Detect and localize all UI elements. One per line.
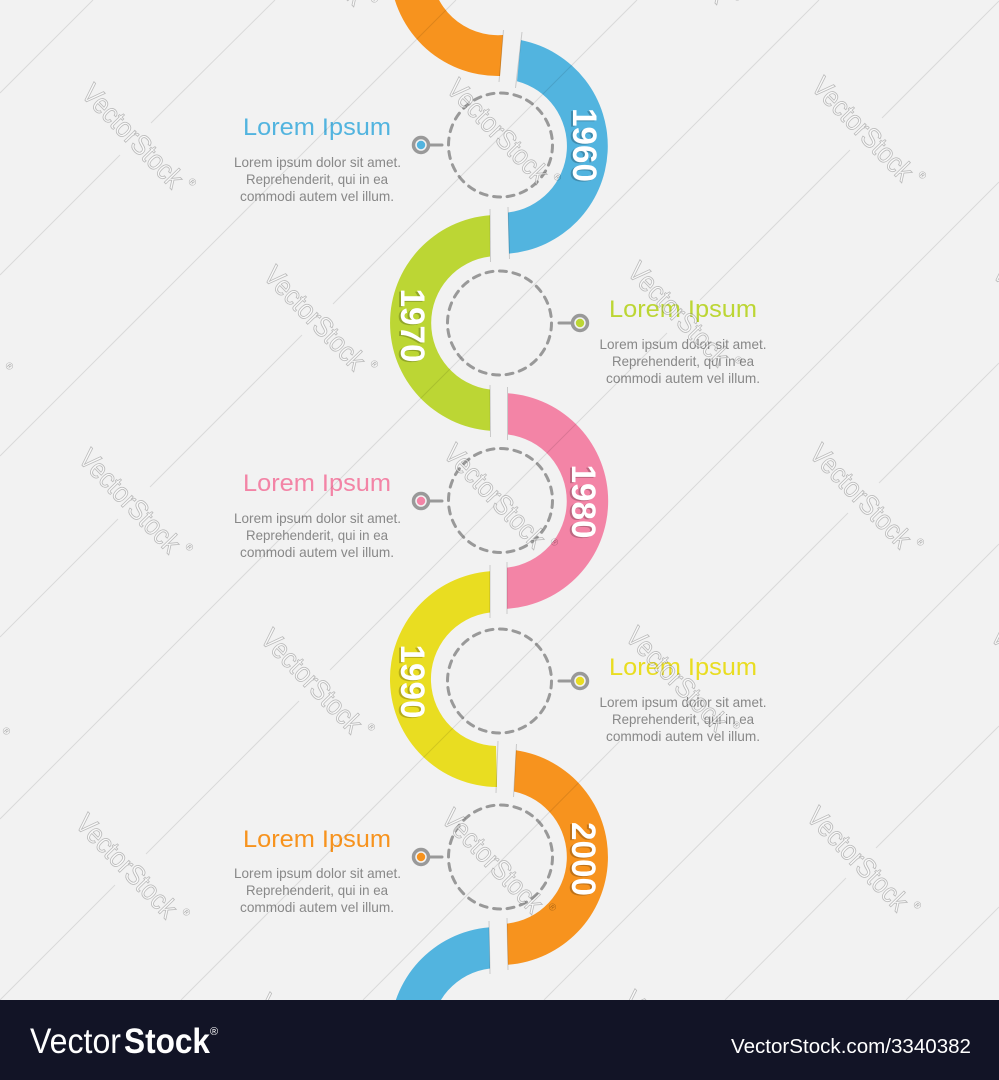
watermark: VectorStock xyxy=(806,71,920,188)
text block 1960 xyxy=(234,114,401,204)
heading 1970: Lorem Ipsum xyxy=(609,296,757,323)
segment: 1970 green xyxy=(390,215,490,431)
text block 1960: Lorem ipsum dolor sit amet. xyxy=(234,154,401,170)
text block 1980: commodi autem vel illum. xyxy=(240,544,394,560)
text block 1980: Lorem ipsum dolor sit amet. xyxy=(234,510,401,526)
icon: pin 1970 xyxy=(559,316,588,330)
dashed circle 1980 xyxy=(448,448,552,552)
text block 1990: Reprehenderit, qui in ea xyxy=(612,711,754,727)
dashed circle 2000 xyxy=(448,805,552,909)
segment: top orange xyxy=(390,0,503,76)
dashed circles xyxy=(448,93,552,909)
watermark: ® xyxy=(731,354,745,368)
watermark: VectorStock xyxy=(255,623,369,740)
watermark: ® xyxy=(364,721,378,735)
text block 2000 xyxy=(234,826,401,915)
watermark: ® xyxy=(2,360,16,374)
text block 1980 xyxy=(234,470,401,560)
segment: 2000 orange xyxy=(507,750,608,965)
heading 1980: Lorem Ipsum xyxy=(243,470,391,497)
watermark: ® xyxy=(729,719,743,733)
icon: pin 1990 xyxy=(559,674,588,688)
watermark: ® xyxy=(545,901,559,915)
watermark: VectorStock xyxy=(622,256,736,373)
year 1960: 1960 xyxy=(565,108,603,182)
footer logo xyxy=(30,1022,218,1061)
text block 1990: Lorem ipsum dolor sit amet. xyxy=(600,694,766,710)
segment: 1990 yellow xyxy=(390,571,497,787)
footer url: VectorStock.com/3340382 xyxy=(731,1036,971,1058)
footer logo: Stock xyxy=(124,1022,210,1061)
segment: 1980 pink xyxy=(507,393,608,609)
text block 1960: Reprehenderit, qui in ea xyxy=(246,171,388,187)
footer logo: Vector xyxy=(30,1022,121,1061)
watermark: ® xyxy=(915,169,929,183)
year labels xyxy=(393,108,603,896)
dashed circle 1990 xyxy=(448,629,552,733)
timeline ribbon xyxy=(390,0,608,1035)
year 2000: 2000 xyxy=(564,822,602,896)
watermark: ® xyxy=(547,536,561,550)
watermark: VectorStock xyxy=(441,73,555,190)
text block 1990: commodi autem vel illum. xyxy=(606,728,760,744)
year 1990: 1990 xyxy=(393,644,431,718)
slot edge shadows xyxy=(489,30,522,974)
dashed circle 1970 xyxy=(448,271,552,375)
text block 2000: commodi autem vel illum. xyxy=(240,899,394,915)
watermark: VectorStock xyxy=(620,621,734,738)
text block 1960: commodi autem vel illum. xyxy=(240,188,394,204)
watermark: VectorStock xyxy=(438,438,552,555)
text block 2000: Reprehenderit, qui in ea xyxy=(246,882,388,898)
dashed circle 1960 xyxy=(448,93,552,197)
watermark: VectorStock xyxy=(436,803,550,920)
watermark: VectorStock xyxy=(76,78,190,195)
text block 1970 xyxy=(600,296,766,386)
text block 1970: Lorem ipsum dolor sit amet. xyxy=(600,336,766,352)
segment: bottom blue xyxy=(390,927,490,1035)
watermark: VectorStock xyxy=(258,260,372,377)
year 1970: 1970 xyxy=(393,288,431,362)
watermark: ® xyxy=(367,358,381,372)
watermark: ® xyxy=(550,171,564,185)
watermark: ® xyxy=(185,176,199,190)
heading 2000: Lorem Ipsum xyxy=(243,826,391,853)
watermark: ® xyxy=(910,899,924,913)
icon: pin 2000 xyxy=(414,850,442,864)
watermark: ® xyxy=(179,906,193,920)
watermark: VectorStock xyxy=(801,801,915,918)
watermark: VectorStock xyxy=(73,443,187,560)
heading 1960: Lorem Ipsum xyxy=(243,114,391,141)
segment: 1960 blue xyxy=(508,40,608,254)
year 1980: 1980 xyxy=(564,464,602,538)
text block 1970: Reprehenderit, qui in ea xyxy=(612,353,754,369)
watermark: VectorStock xyxy=(804,438,918,555)
icon: pin 1980 xyxy=(414,494,442,508)
text block 1990 xyxy=(600,654,766,744)
text block 1970: commodi autem vel illum. xyxy=(606,370,760,386)
footer bar xyxy=(0,1000,999,1080)
icon: pin 1960 xyxy=(414,138,442,152)
watermark: ® xyxy=(182,541,196,555)
watermark: ® xyxy=(913,536,927,550)
watermark: VectorStock xyxy=(70,808,184,925)
heading 1990: Lorem Ipsum xyxy=(609,654,757,681)
footer logo: ® xyxy=(210,1026,218,1038)
text block 2000: Lorem ipsum dolor sit amet. xyxy=(234,865,401,881)
text block 1980: Reprehenderit, qui in ea xyxy=(246,527,388,543)
